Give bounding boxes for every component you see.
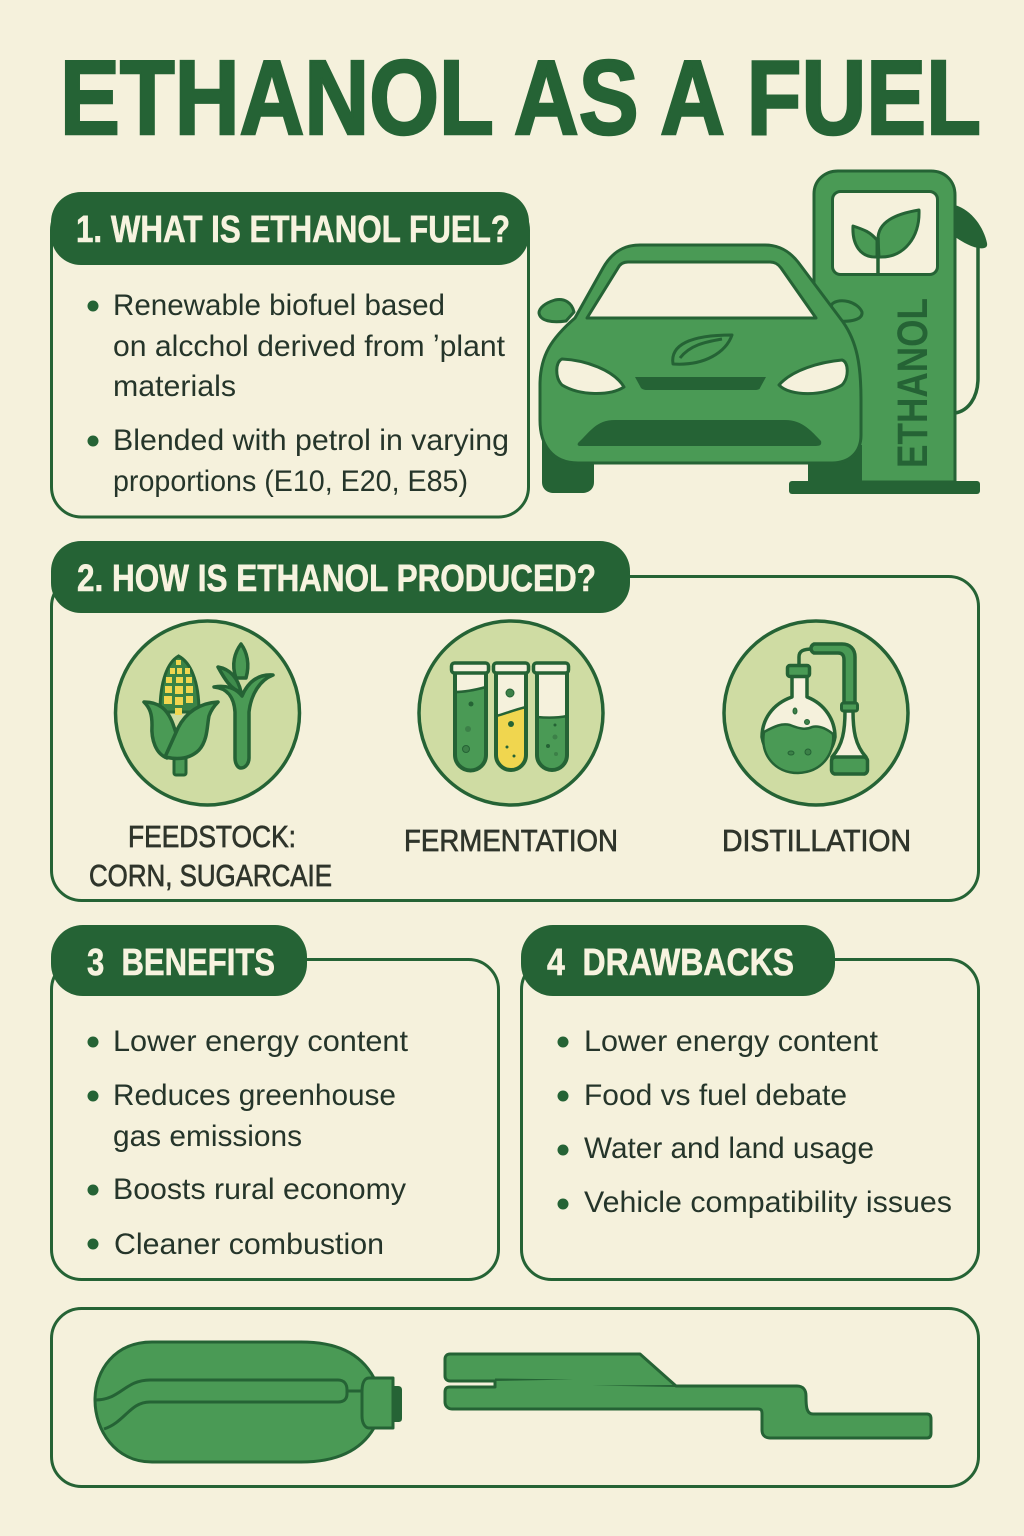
bullet list: definition: Blended with petrol in varying — [113, 424, 509, 457]
heading: section 2: 2. HOW IS ETHANOL PRODUCED? — [77, 558, 596, 600]
panel: benefits — [51, 925, 498, 1280]
panel: drawbacks — [521, 925, 978, 1280]
panel: how is ethanol produced — [51, 541, 978, 900]
panel: what is ethanol fuel — [51, 192, 529, 517]
heading: section 3: 3 BENEFITS — [87, 942, 275, 984]
bullet list: drawbacks: Vehicle compatibility issues — [584, 1186, 952, 1219]
icon: car — [539, 245, 862, 493]
bullet list: definition: proportions (E10, E20, E85) — [113, 465, 468, 498]
bullet list: benefits: Reduces greenhouse — [113, 1079, 396, 1112]
step: fermentation — [404, 621, 618, 858]
bullet list: drawbacks — [558, 1025, 952, 1219]
mirrors — [539, 300, 574, 322]
heading: section 1: 1. WHAT IS ETHANOL FUEL? — [76, 209, 510, 251]
bullet list: drawbacks: Food vs fuel debate — [584, 1079, 847, 1112]
bullet list: benefits — [88, 1025, 409, 1261]
label: feedstock: FEEDSTOCK: — [128, 819, 296, 854]
bullet list: benefits: Cleaner combustion — [114, 1228, 384, 1261]
bullet list: drawbacks: Water and land usage — [584, 1132, 874, 1165]
bullet list: definition — [88, 289, 509, 498]
step: distillation — [722, 621, 911, 858]
fuel hose — [955, 245, 978, 413]
base — [789, 481, 980, 494]
screen — [832, 192, 938, 274]
label: feedstock — [89, 819, 332, 893]
heading: section 2 — [51, 541, 630, 613]
label: feedstock: CORN, SUGARCAIE — [89, 858, 332, 893]
heading: section 1 — [51, 192, 529, 265]
icon: sugarcane plant — [214, 644, 273, 768]
step: feedstock — [89, 621, 332, 893]
heading: section 4 — [521, 925, 835, 996]
icon: test tubes — [452, 663, 568, 770]
bullet list: benefits: Lower energy content — [113, 1025, 409, 1058]
headlights — [557, 359, 624, 394]
icon: fuel canister — [95, 1342, 402, 1462]
label: fermentation: FERMENTATION — [404, 823, 618, 858]
bullet list: definition: materials — [113, 370, 236, 403]
icon: fuel nozzle — [445, 1354, 931, 1438]
pump body — [814, 171, 955, 482]
nozzle — [955, 205, 987, 248]
bullet list: benefits: Boosts rural economy — [113, 1173, 406, 1206]
wheels — [542, 440, 594, 493]
bullet list: definition: Renewable biofuel based — [113, 289, 445, 322]
lower intake — [578, 420, 821, 446]
panel: bottom illustration — [52, 1308, 978, 1486]
heading: section 4: 4 DRAWBACKS — [547, 942, 794, 984]
heading: section 3 — [51, 925, 307, 996]
car body — [540, 245, 861, 463]
label: distillation: DISTILLATION — [722, 823, 911, 858]
bullet list: definition: on alcchol derived from ʼplant — [113, 330, 506, 363]
leaf emblem — [673, 335, 732, 364]
icon: fuel pump — [789, 171, 987, 494]
vertical label: ETHANOL — [889, 298, 937, 468]
grille — [635, 377, 766, 390]
icon: distillation flask — [762, 644, 868, 774]
bullet list: drawbacks: Lower energy content — [584, 1025, 879, 1058]
bullet list: benefits: gas emissions — [113, 1120, 302, 1153]
windshield — [587, 262, 816, 318]
icon: corn cob — [144, 656, 218, 775]
icon: sprout — [853, 210, 919, 275]
